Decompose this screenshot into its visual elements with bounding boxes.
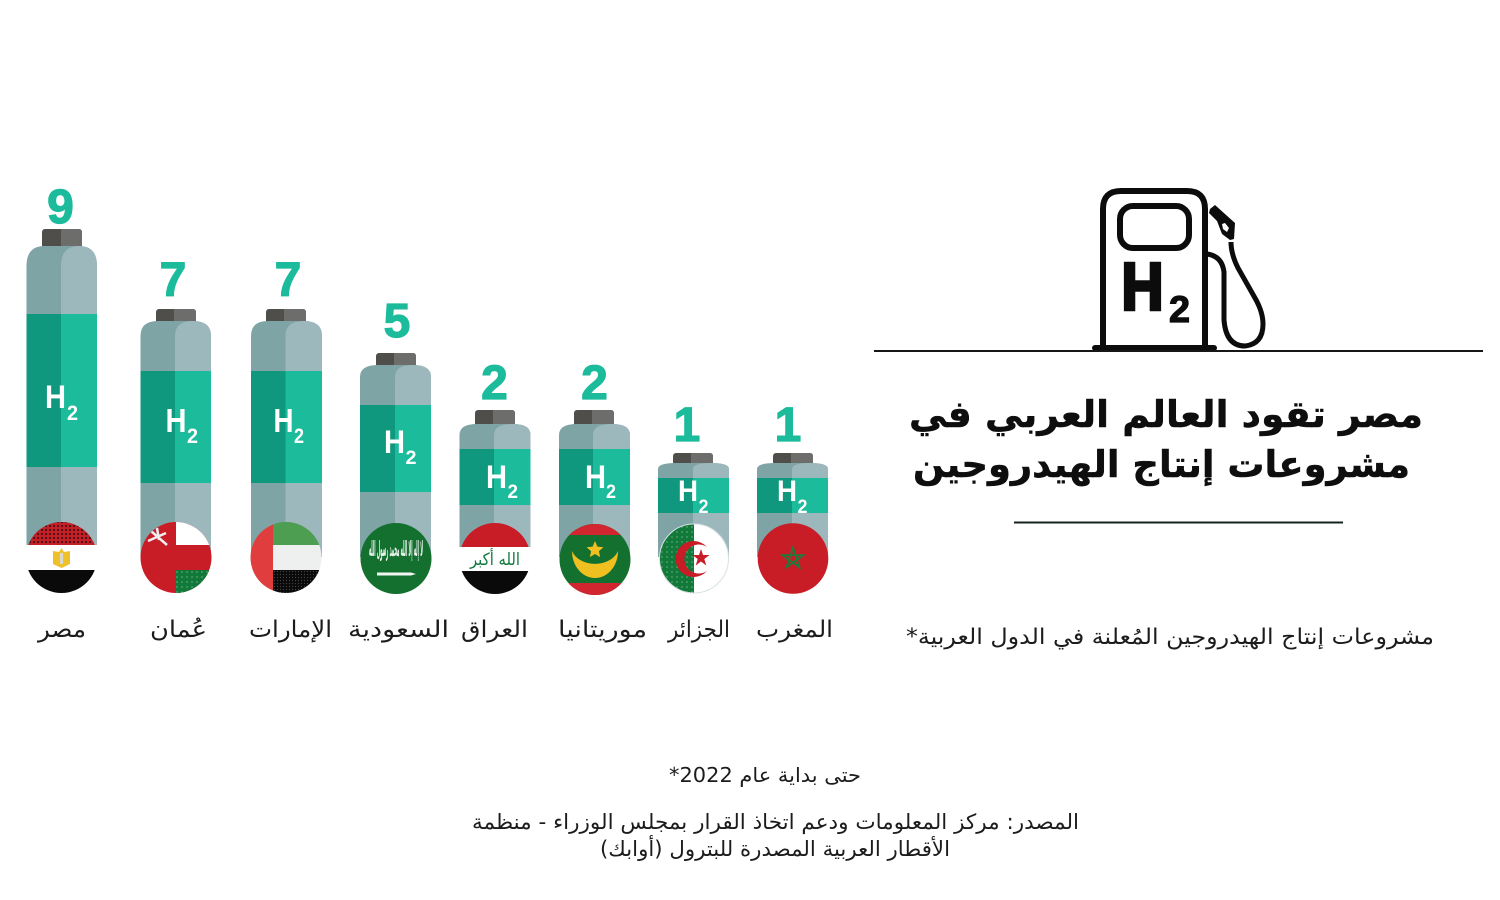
cylinder: UAE [249,254,332,643]
pump H2 text: H [1122,250,1164,324]
H2 label: H [45,379,66,415]
nozzle [1209,205,1235,240]
pump window [1120,206,1189,248]
H2 label: H [166,402,186,439]
title [909,393,1423,486]
cylinder body [559,424,630,557]
hydrogen band [26,314,97,467]
hydrogen band [360,405,431,492]
value: Algeria 1: 1 [674,399,700,452]
flag: Morocco [758,523,828,594]
cylinder cap [773,453,813,465]
H2 label: 2 [508,482,518,503]
divider under title [1014,522,1343,524]
cylinder cap [42,229,82,249]
flag: Algeria [659,524,730,594]
cylinder cap [156,309,196,324]
H2 label: 2 [187,425,198,448]
hydrogen band [757,478,828,513]
hydrogen band [559,449,630,505]
H2 label: 2 [798,497,808,518]
flag: Oman [140,522,212,594]
cylinder: Algeria [658,399,730,643]
H2 label [486,459,518,503]
value: Oman 7: 7 [160,254,186,307]
pump H2 text [1122,250,1190,330]
country name: Iraq: العراق [461,617,528,643]
H2 label [45,379,78,425]
H2 label: H [777,475,797,508]
H2 label: 2 [294,425,304,448]
cylinder: Mauritania [558,357,647,643]
H2 label: 2 [406,448,416,469]
source [472,810,1079,861]
cylinder: Iraq [459,357,531,643]
cylinder: Saudi Arabia [348,295,449,643]
title: مشروعات إنتاج الهيدروجين [913,443,1410,486]
H2 label: H [486,459,507,495]
cylinder body [360,365,431,557]
H2 label: 2 [606,482,616,503]
text: لا إله إلا الله محمد رسول الله [369,537,423,561]
hydrogen band [251,371,322,483]
H2 label [384,424,416,469]
cylinder cap [266,309,306,324]
cylinder: Egypt [26,181,97,643]
H2 label [166,402,198,448]
cylinder cap [376,353,416,368]
title: مصر تقود العالم العربي في [909,393,1423,436]
H2 label [585,459,616,503]
icon: hydrogen fuel pump [1092,191,1263,351]
cylinder cap [574,410,614,427]
hydrogen band [658,478,729,513]
H2 label: 2 [67,402,78,425]
value: Iraq 2: 2 [481,357,508,410]
country name: Morocco: المغرب [756,617,833,643]
country name: Algeria: الجزائر [667,617,730,643]
value: Mauritania 2: 2 [581,357,608,410]
value: Saudi Arabia 5: 5 [384,295,410,348]
pump body [1103,191,1205,349]
cylinder: Morocco [756,399,833,643]
flag: Iraq: الله أكبر [469,548,520,570]
country name: Saudi Arabia: السعودية [348,617,449,643]
pump H2 text: 2 [1169,289,1190,330]
country name: UAE: الإمارات [249,617,332,643]
pump base [1092,345,1217,351]
flag: Egypt [26,522,97,594]
cylinder: Oman [140,254,212,643]
H2 label: H [678,475,698,508]
value: Morocco 1: 1 [775,399,801,452]
hydrogen band [460,449,530,505]
value: Egypt 9: 9 [47,181,74,234]
cylinder body [140,321,211,557]
divider under pump [874,350,1483,352]
H2 label: 2 [698,497,708,518]
country name: Egypt: مصر [37,617,86,643]
value: UAE 7: 7 [275,254,301,307]
date note: حتى بداية عام 2022* [669,763,861,787]
flag: UAE [250,522,323,594]
cylinder body [658,463,729,557]
H2 label: H [384,424,405,460]
fuel hose [1207,242,1263,346]
source: المصدر: مركز المعلومات ودعم اتخاذ القرار بمجلس الوزراء - منظمة [472,810,1079,835]
cylinder cap [475,410,515,427]
cylinder body [26,246,97,557]
country name: Oman: عُمان [150,617,207,643]
H2 label [678,475,708,518]
hydrogen band [140,371,211,483]
source: الأقطار العربية المصدرة للبترول (أوابك) [600,835,950,861]
H2 label: H [585,459,606,495]
flag: Mauritania [559,524,631,596]
H2 label [274,402,304,448]
country name: Mauritania: موريتانيا [558,617,647,643]
cylinder body [757,463,828,557]
subtitle note: مشروعات إنتاج الهيدروجين المُعلنة في الدول العربية* [906,625,1434,650]
flag: Iraq [459,523,531,595]
H2 label: H [274,402,294,439]
cylinder cap [673,453,713,465]
flag: Saudi Arabia [360,523,432,594]
cylinder body [460,424,530,557]
H2 label [777,475,808,518]
cylinder body [251,321,322,557]
